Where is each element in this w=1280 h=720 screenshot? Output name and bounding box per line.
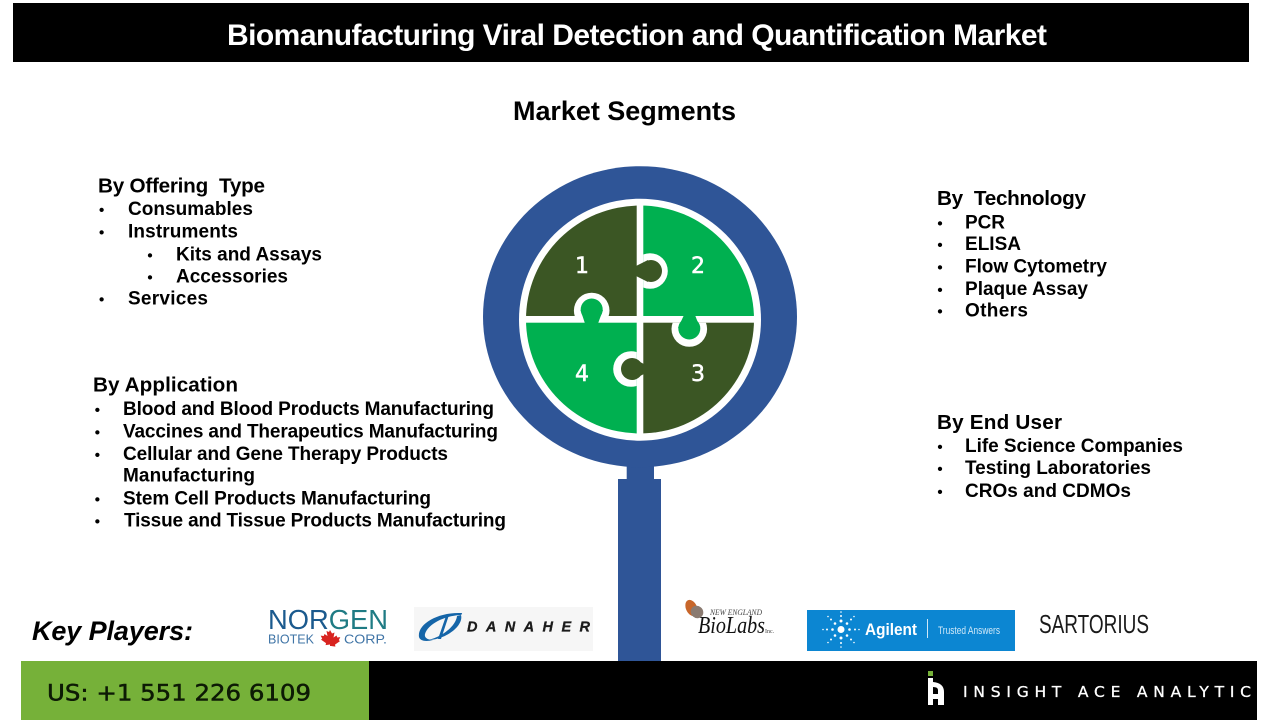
- logo: danaher: DANAHER: [467, 620, 591, 636]
- logo: new england biolabs: NEW ENGLAND: [709, 608, 762, 617]
- panel: by technology: Plaque Assay: [965, 279, 1088, 300]
- phone panel: US: +1 551 226 6109: [47, 682, 311, 706]
- magnifier handle: [618, 460, 661, 662]
- panel: by application: •: [95, 425, 100, 442]
- logo: new england biolabs: [683, 598, 775, 639]
- puzzle pieces: [520, 200, 760, 439]
- panel: by application: Stem Cell Products Manufacturing: [123, 488, 431, 509]
- panel: by offering type: Kits and Assays: [176, 245, 322, 266]
- logo: agilent: Trusted Answers: [938, 625, 1000, 637]
- logo: norgen biotek: CORP.: [344, 632, 387, 646]
- heading: market segments: Market Segments: [513, 96, 736, 126]
- panel: by end user: CROs and CDMOs: [965, 481, 1131, 502]
- panel: by offering type: •: [99, 202, 104, 219]
- panel: by offering type: Services: [128, 288, 208, 310]
- panel: by offering type: [98, 175, 322, 310]
- panel: by technology: •: [937, 215, 943, 232]
- panel: by application: Blood and Blood Products Manufacturing: [123, 399, 494, 420]
- magnifier ring: [483, 166, 797, 467]
- panel: by technology: Others: [965, 301, 1028, 322]
- panel: by application: •: [95, 402, 100, 419]
- panel: by application: •: [95, 447, 100, 464]
- panel: by application: •: [95, 491, 100, 508]
- panel: by technology: •: [937, 237, 943, 254]
- company panel: INSIGHT ACE ANALYTIC: [963, 683, 1251, 701]
- logo: new england biolabs: Inc.: [765, 629, 775, 635]
- phone panel: [21, 661, 369, 720]
- panel: by end user: Life Science Companies: [965, 436, 1183, 457]
- panel: by offering type: Instruments: [128, 222, 238, 243]
- logo: norgen biotek: NORGEN: [268, 604, 388, 635]
- panel: by technology: •: [937, 260, 943, 277]
- panel: by offering type: •: [99, 225, 104, 242]
- panel: by technology: [937, 187, 1107, 322]
- panel: by application: By Application: [93, 374, 238, 397]
- logo: new england biolabs: BioLabs: [698, 613, 765, 639]
- panel: by end user: By End User: [937, 411, 1062, 434]
- panel: by end user: •: [937, 439, 943, 456]
- panel: by technology: •: [937, 282, 943, 299]
- agilent starburst: [822, 611, 860, 648]
- puzzle numbers: 1: [575, 254, 589, 279]
- puzzle numbers: 2: [691, 254, 705, 279]
- icon: insight ace logo: [928, 671, 944, 705]
- puzzle numbers: 3: [691, 362, 705, 387]
- panel: by application: Cellular and Gene Therapy Products: [123, 444, 448, 465]
- company panel: [369, 661, 1257, 720]
- logo: danaher: [414, 607, 593, 651]
- panel: by offering type: Consumables: [128, 199, 253, 220]
- panel: by technology: Flow Cytometry: [965, 257, 1107, 278]
- puzzle numbers: 4: [575, 362, 589, 387]
- panel: by technology: •: [937, 304, 943, 321]
- panel: by offering type: Accessories: [176, 267, 288, 288]
- logo: sartorius: SARTORIUS: [1039, 609, 1149, 639]
- puzzle knobs: [580, 260, 700, 380]
- panel: by technology: ELISA: [965, 234, 1021, 255]
- logo: agilent: Agilent: [865, 620, 917, 639]
- heading: key players: Key Players:: [32, 616, 193, 646]
- panel: by end user: •: [937, 461, 943, 478]
- panel: by technology: PCR: [965, 212, 1005, 233]
- panel: by end user: Testing Laboratories: [965, 458, 1151, 479]
- logo: agilent: [807, 610, 1015, 651]
- panel: by offering type: •: [147, 270, 153, 287]
- panel: by application: •: [95, 514, 100, 531]
- panel: by offering type: •: [147, 248, 153, 265]
- title banner: [13, 3, 1249, 62]
- icon: magnifying glass with puzzle: [483, 166, 797, 662]
- footer bar: [21, 661, 1257, 720]
- panel: by application: Tissue and Tissue Products Manufacturing: [124, 511, 506, 532]
- panel: by application: [93, 374, 506, 532]
- logo: norgen biotek: BIOTEK: [268, 632, 315, 646]
- puzzle knob sockets: [574, 253, 707, 387]
- panel: by offering type: •: [99, 292, 104, 308]
- panel: by end user: [937, 411, 1183, 502]
- title banner: Biomanufacturing Viral Detection and Quantification Market: [227, 19, 1047, 52]
- lens: [519, 199, 761, 441]
- panel: by end user: •: [937, 484, 943, 501]
- panel: by offering type: By Offering Type: [98, 175, 265, 198]
- panel: by technology: By Technology: [937, 187, 1086, 210]
- panel: by application: Manufacturing: [123, 466, 255, 487]
- puzzle numbers: [575, 254, 705, 387]
- panel: by application: Vaccines and Therapeutics Manufacturing: [123, 422, 498, 443]
